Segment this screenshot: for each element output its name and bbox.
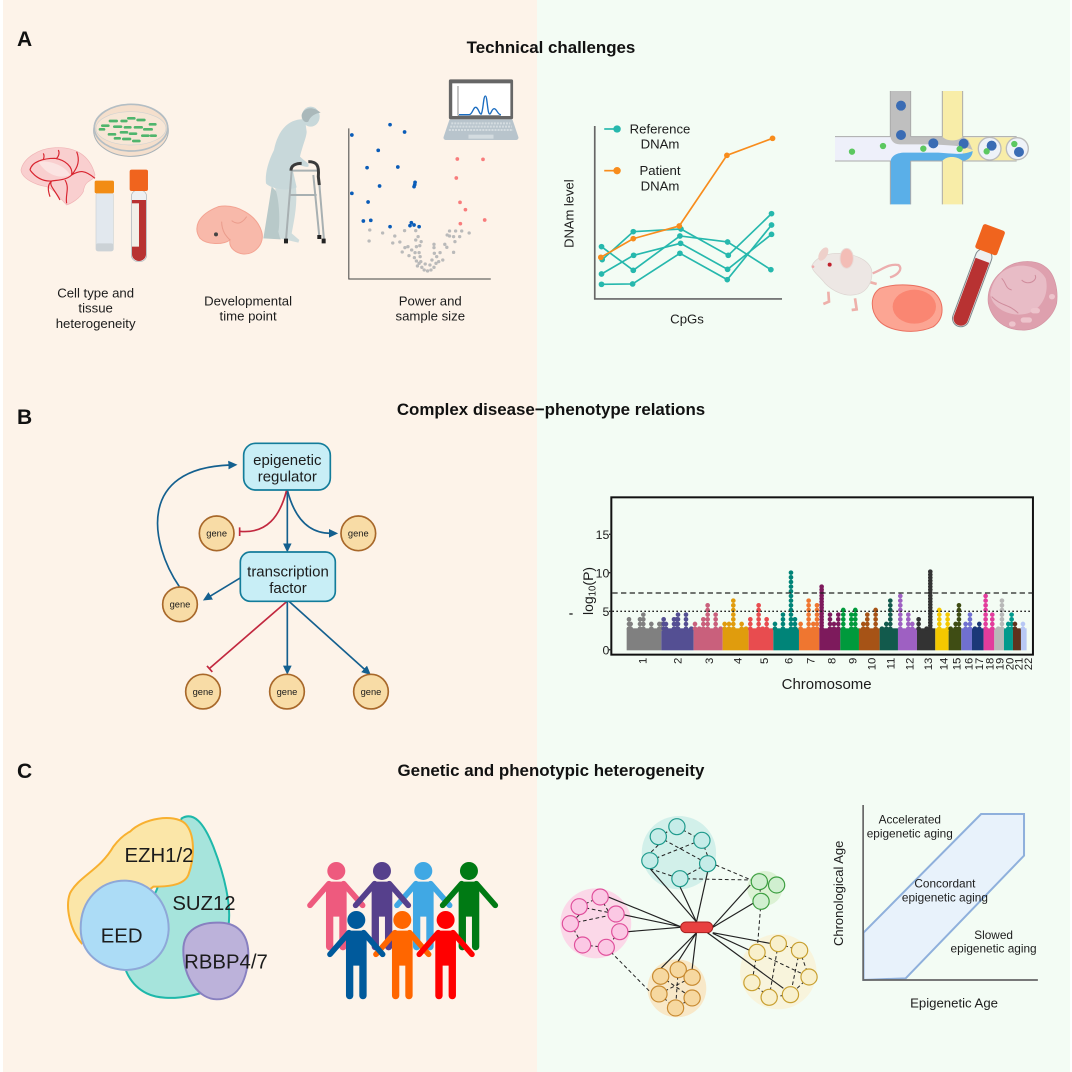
box: transcription factor: factor: [269, 580, 307, 597]
heading: genetic and phenotypic heterogeneity: Genetic and phenotypic heterogeneity: [398, 761, 705, 780]
person: navy: [330, 911, 383, 999]
person: purple: [356, 862, 408, 950]
x axis chromosome labels: 20: [1005, 658, 1017, 670]
y axis label: DNAm level: [561, 179, 576, 248]
icon group: brain, dish and tubes: [21, 104, 168, 262]
x axis chromosome labels: 8: [826, 658, 838, 664]
label: concordant: epigenetic aging: [902, 891, 988, 904]
person: orange: [376, 911, 429, 999]
icon: group of people: [310, 862, 495, 999]
label: accelerated: epigenetic aging: [867, 827, 953, 840]
x axis chromosome labels: 1: [637, 658, 649, 664]
gene node: [186, 674, 220, 709]
icon: tumour: [988, 261, 1057, 330]
gene node: [163, 587, 197, 622]
y axis label: log: [580, 596, 596, 615]
subunit shape: EED: [81, 881, 169, 970]
panel letter B: B: [17, 406, 32, 429]
box: transcription factor: transcription: [247, 563, 329, 580]
caption: cell type and tissue heterogeneity: Cell type and: [57, 286, 134, 301]
gene node: [354, 674, 388, 709]
arrow: transcription factor to centre gene: [285, 602, 290, 667]
icon: cell with nucleus: [872, 285, 942, 331]
panel B right: Manhattan plot: [569, 497, 1035, 693]
heading: technical challenges: Technical challenges: [467, 38, 635, 57]
x axis label: Epigenetic Age: [910, 995, 998, 1010]
legend: reference DNAm: Reference: [630, 121, 690, 136]
nodes: yellow module: [744, 936, 817, 1005]
y axis tick labels: 15: [596, 528, 609, 542]
x axis chromosome labels: 12: [905, 658, 917, 670]
x axis chromosome labels: 21: [1013, 658, 1025, 670]
chart: DNAm level across CpGs: [561, 121, 782, 327]
x axis chromosome labels: 9: [847, 658, 859, 664]
series: reference DNAm: [602, 214, 772, 284]
SNP points by chromosome: [629, 569, 1023, 629]
gene node: gene: [193, 687, 213, 697]
x axis chromosome labels: 17: [974, 658, 986, 670]
inhibition: transcription factor represses gene: [207, 602, 287, 672]
panel B left: regulatory network diagram: [158, 443, 388, 709]
label: slowed: [951, 929, 1037, 956]
gene node: gene: [361, 687, 381, 697]
x axis chromosome labels: 3: [704, 658, 716, 664]
person: green: [443, 862, 495, 950]
legend: reference DNAm: [604, 121, 690, 152]
label: accelerated: [867, 813, 953, 840]
box: transcription factor: [240, 552, 335, 601]
box: epigenetic regulator: regulator: [258, 469, 317, 486]
y axis tick labels: [596, 528, 609, 658]
heading: complex disease-phenotype relations: Complex disease−phenotype relations: [397, 400, 705, 419]
gene node: [270, 674, 304, 709]
y axis tick labels: 10: [596, 566, 609, 580]
hub node: [681, 922, 713, 933]
label: EZH1/2: EZH1/2: [125, 845, 193, 867]
x axis chromosome labels: 2: [673, 658, 685, 664]
label: concordant: Concordant: [914, 878, 976, 891]
right background panel: [537, 0, 1070, 1072]
caption: cell type and tissue heterogeneity: heterogeneity: [56, 316, 136, 331]
label: concordant: [902, 878, 988, 904]
chart: volcano plot: [349, 125, 491, 279]
x axis chromosome labels: 13: [923, 658, 935, 670]
icon: tissue sample tube: [95, 181, 114, 251]
y axis label: Chronological Age: [831, 841, 846, 946]
box: epigenetic regulator: [244, 443, 330, 490]
caption: power and sample size: sample size: [396, 309, 465, 324]
legend: reference DNAm: DNAm: [641, 137, 679, 152]
x axis chromosome labels: 10: [866, 658, 878, 670]
y axis minus sign: [569, 612, 573, 616]
nodes: pink module: [562, 889, 628, 955]
legend: patient DNAm: DNAm: [641, 178, 679, 193]
gene node: gene: [348, 529, 369, 539]
x axis chromosome labels: 5: [759, 658, 771, 664]
suggestive significance line: [612, 609, 1032, 613]
subunit shape: RBBP4/7: [183, 923, 248, 999]
axes: [863, 805, 1038, 980]
person: pink: [310, 862, 363, 950]
subunit shape: EZH1/2: [68, 818, 193, 943]
x axis chromosome labels: 19: [995, 658, 1007, 670]
label: SUZ12: SUZ12: [172, 893, 236, 915]
gene node: gene: [206, 529, 227, 539]
x axis chromosome labels: 18: [985, 658, 997, 670]
arrow: regulator activates gene: [287, 490, 331, 533]
panel C left: PRC2 complex and people: [68, 816, 495, 999]
label: RBBP4/7: RBBP4/7: [184, 951, 268, 973]
x axis label: Chromosome: [782, 676, 872, 693]
caption: developmental time point: Developmental: [204, 293, 292, 308]
caption: power and sample size: Power and: [399, 293, 462, 308]
panel letter A: A: [17, 28, 32, 51]
panel A left: power plot and captions: [56, 79, 518, 331]
chart: module network: [560, 816, 817, 1017]
person: blue: [397, 862, 450, 950]
caption: cell type and tissue heterogeneity: [56, 286, 136, 331]
inhibition: regulator represses gene: [240, 490, 287, 536]
series: patient DNAm: [601, 138, 773, 257]
icon group: mouse, cell, tube, tumour: [812, 223, 1057, 331]
panel letter C: C: [17, 760, 32, 783]
x axis chromosome labels: 14: [938, 658, 950, 670]
icon: petri dish: [94, 104, 168, 156]
gene node: [199, 516, 234, 551]
gene node: gene: [170, 600, 190, 610]
x axis chromosome labels: [637, 658, 1035, 670]
y axis tick labels: 5: [602, 605, 609, 619]
x axis chromosome labels: 22: [1023, 658, 1035, 670]
icon: embryo: [197, 206, 262, 254]
icon: blood tube, tilted: [947, 223, 1006, 330]
panel C right: network and epigenetic aging plot: [560, 805, 1038, 1017]
icon: mouse: [812, 246, 900, 310]
nodes: orange module: [651, 962, 700, 1016]
y axis label: 10: [587, 586, 598, 596]
plot frame: [611, 497, 1033, 655]
nodes: green module: [751, 874, 785, 909]
panel A right: DNAm chart: [561, 121, 782, 327]
x axis label: CpGs: [670, 312, 704, 327]
gene node: [341, 516, 376, 551]
concordance band: [863, 814, 1024, 980]
icon: blood tube: [130, 170, 148, 262]
x axis chromosome labels: 15: [952, 658, 964, 670]
caption: cell type and tissue heterogeneity: tissue: [78, 301, 113, 316]
label: EED: EED: [101, 926, 143, 948]
caption: developmental time point: [204, 293, 292, 324]
gene node: gene: [277, 687, 297, 697]
x axis chromosome labels: 16: [963, 658, 975, 670]
icon: walker: [286, 162, 324, 243]
chromosome base blocks: [627, 628, 1027, 650]
subunit shape: SUZ12: [124, 816, 230, 998]
x axis chromosome labels: 11: [885, 658, 897, 669]
y axis ticks: [609, 534, 611, 650]
icon: brain with vessels: [21, 148, 95, 205]
x axis chromosome labels: 7: [805, 658, 817, 664]
left background panel: [3, 0, 537, 1072]
genome-wide significance line: [612, 591, 1032, 595]
icon: elderly person: [263, 107, 321, 243]
caption: power and sample size: [396, 293, 465, 324]
person: red: [419, 911, 472, 999]
legend: patient DNAm: [604, 163, 681, 193]
nodes: teal module: [642, 819, 716, 887]
label: slowed: epigenetic aging: [951, 943, 1037, 956]
chart: epigenetic versus chronological age: [831, 805, 1038, 1010]
label: accelerated: Accelerated: [879, 813, 941, 826]
icon group: embryo and elderly person: [197, 107, 324, 254]
y axis tick labels: 0: [602, 644, 609, 658]
arrow: transcription factor to right gene: [289, 602, 365, 670]
label: slowed: Slowed: [974, 929, 1013, 942]
x axis chromosome labels: 6: [784, 658, 796, 664]
icon: microfluidic droplet chip: [835, 91, 1028, 204]
icon: laptop with peak plot: [443, 79, 518, 140]
x axis chromosome labels: 4: [732, 658, 744, 664]
arrow: transcription factor to gene: [209, 578, 241, 597]
arrow: regulator to transcription factor: [285, 490, 290, 545]
arrow: feedback gene to epigenetic regulator: [158, 465, 230, 587]
caption: developmental time point: time point: [220, 309, 277, 324]
box: epigenetic regulator: epigenetic: [253, 452, 322, 469]
y axis label: (P): [580, 567, 596, 586]
legend: patient DNAm: Patient: [639, 163, 681, 178]
